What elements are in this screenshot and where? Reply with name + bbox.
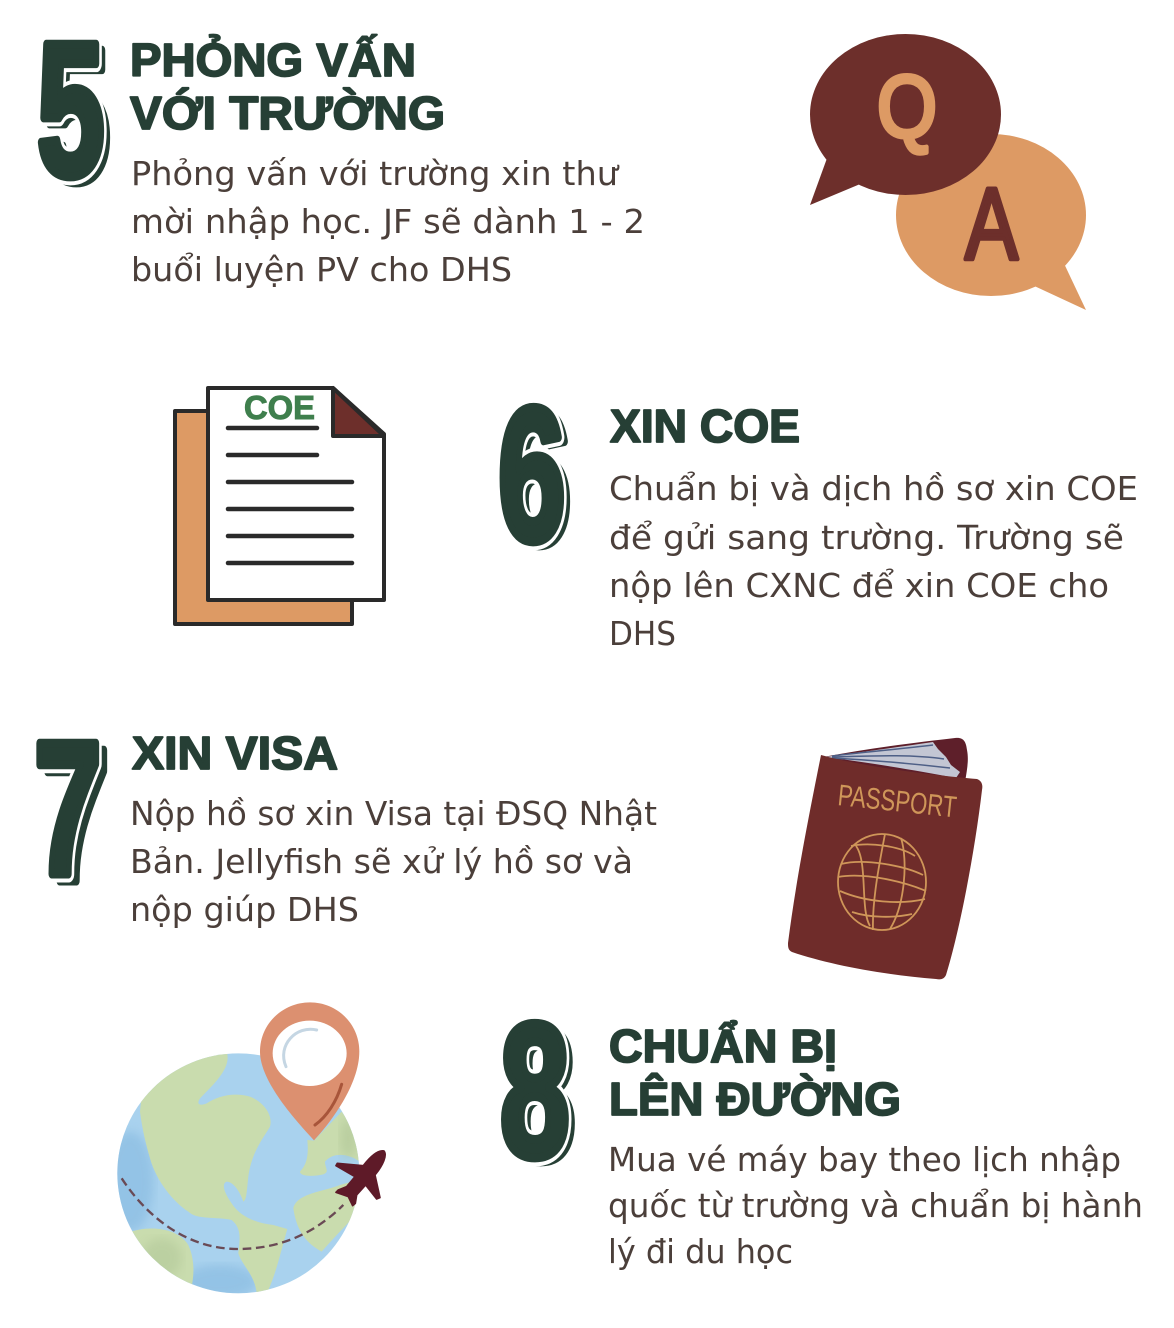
heading: step 8: CHUẨN BỊ [609, 1020, 837, 1072]
text block: step 6 description: Chuẩn bị và dịch hồ sơ xin COE [609, 469, 1138, 508]
icon: globe with pin and plane [107, 1002, 385, 1298]
number 5: 5 [37, 3, 105, 215]
icon: passport [788, 738, 982, 979]
icon: COE document [175, 388, 384, 624]
icon: Q and A speech bubbles [810, 34, 1086, 310]
number 5: 5 [43, 9, 111, 221]
text block: step 6 description: nộp lên CXNC để xin COE cho [609, 566, 1109, 605]
panel: step 5 interview [37, 3, 1086, 310]
number 5: 5 [37, 3, 105, 215]
text block: step 6 description: DHS [609, 614, 676, 653]
text block: step 6 description: để gửi sang trường. Trường sẽ [609, 518, 1124, 557]
icon: COE document: COE [244, 389, 315, 426]
number 6: 6 [504, 372, 572, 584]
heading: step 5: VỚI TRƯỜNG [130, 87, 445, 139]
number 7: 7 [42, 709, 110, 921]
heading: step 6: XIN COE [610, 400, 800, 452]
text block: step 7 description: nộp giúp DHS [130, 890, 359, 929]
text block: step 7 description [130, 794, 657, 929]
text block: step 8 description: lý đi du học [608, 1232, 793, 1271]
heading: step 8 [609, 1020, 901, 1125]
text block: step 5 description: buổi luyện PV cho DHS [131, 250, 512, 289]
panel: step 6 COE [175, 368, 1138, 653]
text block: step 8 description: quốc từ trường và chuẩn bị hành [608, 1186, 1143, 1225]
heading: step 5 [130, 34, 445, 139]
icon: Q and A speech bubbles: Q [877, 57, 937, 156]
heading: step 5: PHỎNG VẤN [130, 34, 416, 86]
number 8: 8 [506, 989, 576, 1201]
heading: step 8: LÊN ĐƯỜNG [609, 1073, 901, 1125]
text block: step 7 description: Nộp hồ sơ xin Visa tại ĐSQ Nhật [130, 794, 657, 833]
icon: Q and A speech bubbles: A [965, 167, 1018, 281]
number 6: 6 [498, 368, 566, 580]
heading: step 7: XIN VISA [132, 727, 338, 779]
text block: step 8 description [608, 1140, 1143, 1271]
panel: step 8 departure [107, 985, 1143, 1298]
text block: step 8 description: Mua vé máy bay theo lịch nhập [608, 1140, 1121, 1179]
number 6: 6 [498, 368, 566, 580]
panel: step 7 visa [34, 702, 982, 979]
number 7: 7 [34, 702, 102, 914]
number 7: 7 [34, 702, 102, 914]
number 8: 8 [500, 985, 570, 1197]
text block: step 6 description [609, 469, 1138, 653]
text block: step 7 description: Bản. Jellyfish sẽ xử lý hồ sơ và [130, 842, 633, 881]
text block: step 5 description: Phỏng vấn với trường xin thư [131, 154, 620, 193]
text block: step 5 description [131, 154, 645, 289]
icon: passport: PASSPORT [836, 779, 958, 824]
number 8: 8 [500, 985, 570, 1197]
text block: step 5 description: mời nhập học. JF sẽ dành 1 - 2 [131, 202, 645, 241]
